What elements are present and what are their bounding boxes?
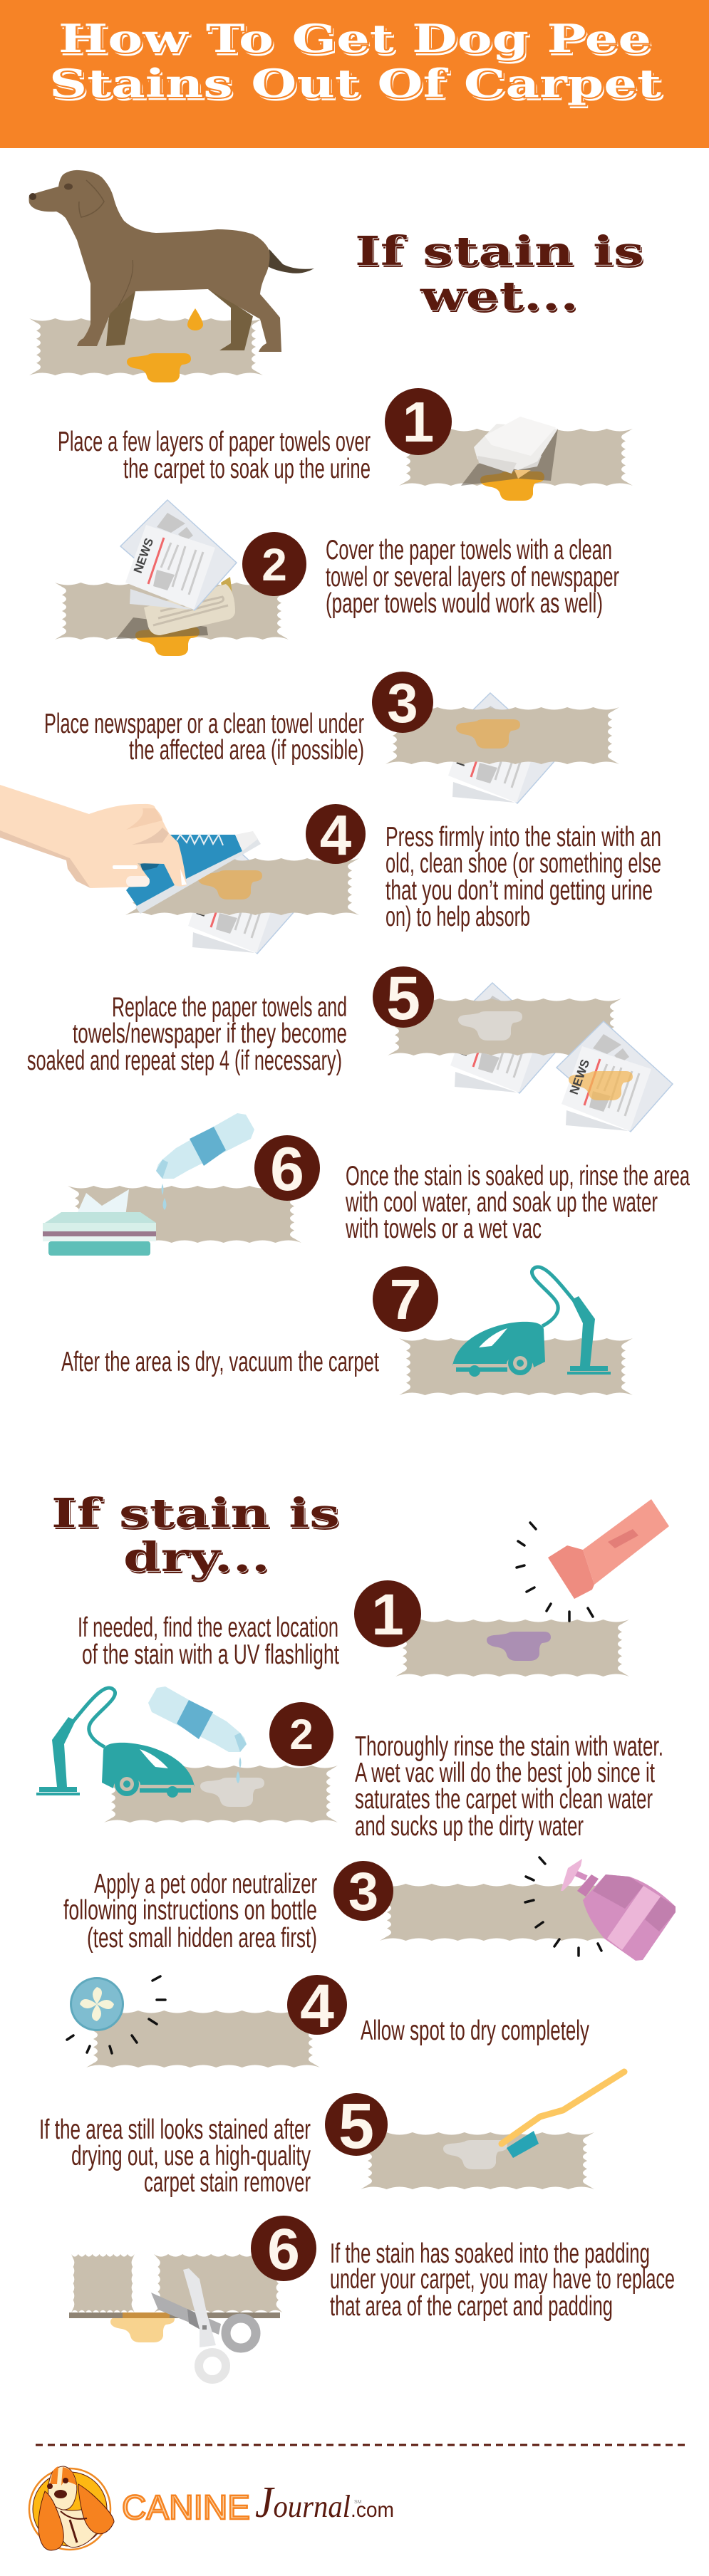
number 4 xyxy=(306,803,366,867)
instruction text xyxy=(355,1731,663,1842)
illustration: fan over carpet xyxy=(67,1976,320,2067)
illustration: hand pressing shoe into stain xyxy=(0,785,359,954)
dry step 3 xyxy=(63,1857,676,1961)
number 1: 1 xyxy=(371,1582,404,1647)
heading: If stain is dry: dry... xyxy=(125,1536,271,1583)
illustration: paper towels on carpet xyxy=(399,417,633,501)
logo dog badge xyxy=(29,2466,114,2550)
header banner xyxy=(0,0,709,148)
number 5 xyxy=(373,964,434,1033)
number 6: 6 xyxy=(270,1135,304,1204)
illustration: hand pressing shoe into stain: NEWS xyxy=(194,880,219,918)
wet step 7 xyxy=(61,1266,633,1395)
heading: If stain is dry xyxy=(51,1490,341,1583)
instruction text xyxy=(63,1869,317,1954)
number 7 xyxy=(373,1266,438,1332)
logo: Canine Journal xyxy=(29,2466,394,2550)
wet step 2 xyxy=(55,500,619,656)
logo wordmark: .com xyxy=(351,2498,394,2522)
illustration: replacing newspaper: NEWS xyxy=(456,1019,481,1058)
instruction text xyxy=(385,822,661,932)
instruction text: Place newspaper or a clean towel under xyxy=(44,709,364,739)
title: Stains Out Of Carpet xyxy=(49,61,661,106)
title: Stains Out Of Carpet xyxy=(51,63,663,109)
heading: If stain is wet: If stain is xyxy=(356,230,646,277)
number 1: 1 xyxy=(403,390,434,454)
instruction text: on) to help absorb xyxy=(385,902,530,932)
logo wordmark xyxy=(122,2478,394,2527)
number 3 xyxy=(372,672,433,734)
illustration: vacuum and water bottle xyxy=(36,1686,338,1823)
number 3: 3 xyxy=(348,1862,378,1922)
number 2 xyxy=(242,532,306,596)
instruction text xyxy=(44,709,364,766)
wet step 5 xyxy=(27,964,673,1132)
number 6 xyxy=(254,1135,320,1204)
instruction text: the affected area (if possible) xyxy=(129,735,364,766)
illustration: vacuum on carpet xyxy=(399,1267,633,1395)
instruction text: towels/newspaper if they become xyxy=(73,1018,347,1049)
number 3 xyxy=(333,1861,393,1922)
dry step 6 xyxy=(69,2216,675,2379)
logo wordmark: Journal xyxy=(255,2478,351,2527)
dry step 5 xyxy=(39,2072,624,2198)
number 4: 4 xyxy=(300,1972,334,2040)
instruction text: and sucks up the dirty water xyxy=(355,1811,584,1842)
instruction text: following instructions on bottle xyxy=(63,1895,317,1926)
heading: If stain is dry: If stain is xyxy=(51,1490,340,1537)
instruction text xyxy=(330,2238,675,2322)
instruction text xyxy=(27,992,347,1076)
instruction text: drying out, use a high-quality xyxy=(71,2141,311,2171)
instruction text xyxy=(39,2114,311,2198)
heading: If stain is wet: If stain is xyxy=(355,228,644,275)
instruction text: Replace the paper towels and xyxy=(112,992,347,1023)
instruction text xyxy=(78,1612,339,1670)
number 4 xyxy=(287,1972,347,2040)
dry step 4 xyxy=(67,1972,589,2067)
number 6 xyxy=(251,2216,316,2282)
instruction text: After the area is dry, vacuum the carpet xyxy=(61,1347,379,1377)
instruction text: If needed, find the exact location xyxy=(78,1612,338,1643)
wet step 6 xyxy=(43,1113,690,1256)
wet step 3 xyxy=(44,672,619,803)
title: How To Get Dog Pee xyxy=(61,19,653,64)
instruction text xyxy=(345,1161,690,1244)
instruction text: (test small hidden area first) xyxy=(87,1923,317,1954)
instruction text xyxy=(58,427,371,484)
instruction text: Apply a pet odor neutralizer xyxy=(94,1869,317,1899)
number 5: 5 xyxy=(386,964,420,1033)
illustration: UV flashlight on stain xyxy=(395,1499,669,1677)
number 5 xyxy=(325,2091,388,2162)
illustration: replacing newspaper: NEWS xyxy=(567,1058,592,1096)
dog illustration with carpet and stain xyxy=(29,170,314,382)
wet step 1 xyxy=(58,388,633,501)
illustration: scissors cutting carpet and padding xyxy=(69,2254,282,2379)
illustration: newspaper under carpet xyxy=(385,693,619,803)
heading: If stain is wet: wet... xyxy=(420,273,579,320)
illustration: brush scrubbing stain xyxy=(361,2072,624,2189)
instruction text xyxy=(326,535,619,619)
logo wordmark: SM xyxy=(354,2500,362,2505)
number 4: 4 xyxy=(320,803,352,867)
number 7: 7 xyxy=(390,1268,421,1331)
number 1 xyxy=(354,1580,421,1647)
heading: If stain is dry: If stain is xyxy=(53,1492,341,1539)
dry step 2 xyxy=(36,1686,663,1842)
logo wordmark: CANINE xyxy=(122,2489,250,2527)
illustration: replacing newspaper xyxy=(388,983,673,1132)
heading: If stain is dry: dry... xyxy=(123,1534,270,1581)
instruction text: the carpet to soak up the urine xyxy=(123,454,371,484)
number 6: 6 xyxy=(267,2217,300,2282)
illustration: newspaper under carpet: NEWS xyxy=(454,729,479,768)
instruction text: with towels or a wet vac xyxy=(345,1214,542,1244)
title xyxy=(49,16,663,109)
illustration: newspaper and towel on carpet: NEWS xyxy=(131,536,156,575)
instruction text: Place a few layers of paper towels over xyxy=(58,427,371,457)
instruction text: carpet stain remover xyxy=(144,2167,311,2198)
number 5: 5 xyxy=(338,2091,374,2162)
number 2: 2 xyxy=(289,1711,314,1758)
instruction text: If the area still looks stained after xyxy=(39,2114,311,2145)
illustration: newspaper and towel on carpet xyxy=(55,500,289,656)
dry step 1 xyxy=(78,1499,669,1677)
number 2: 2 xyxy=(262,539,287,590)
number 3: 3 xyxy=(387,672,418,734)
instruction text: of the stain with a UV flashlight xyxy=(82,1639,339,1670)
illustration: odor neutralizer bottle xyxy=(380,1857,676,1961)
instruction text: Allow spot to dry completely xyxy=(361,2016,589,2046)
instruction text: soaked and repeat step 4 (if necessary) xyxy=(27,1045,342,1076)
number 2 xyxy=(269,1702,333,1766)
illustration: water bottle and tissue box xyxy=(43,1113,301,1256)
title: How To Get Dog Pee xyxy=(58,16,651,61)
wet step 4 xyxy=(0,785,661,954)
number 1 xyxy=(385,388,452,455)
heading: If stain is wet xyxy=(355,228,646,322)
heading: If stain is wet: wet... xyxy=(421,275,580,322)
